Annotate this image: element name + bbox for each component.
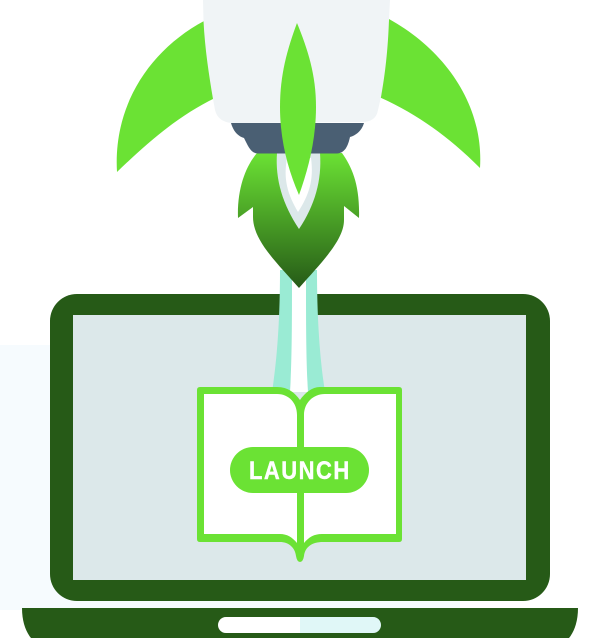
laptop base: [22, 608, 578, 638]
flame: [238, 153, 359, 288]
rocket body: [203, 0, 390, 123]
inner flame: [277, 153, 320, 229]
center leaf: [280, 23, 316, 195]
launch button: [230, 447, 369, 493]
launch button: LAUNCH: [249, 457, 351, 484]
right fin: [379, 19, 480, 168]
rocket nozzle: [231, 123, 364, 154]
open book: [197, 387, 402, 562]
laptop screen: [50, 294, 550, 601]
left fin: [117, 21, 215, 172]
exhaust trail: [272, 270, 325, 392]
background panel: [0, 345, 460, 610]
